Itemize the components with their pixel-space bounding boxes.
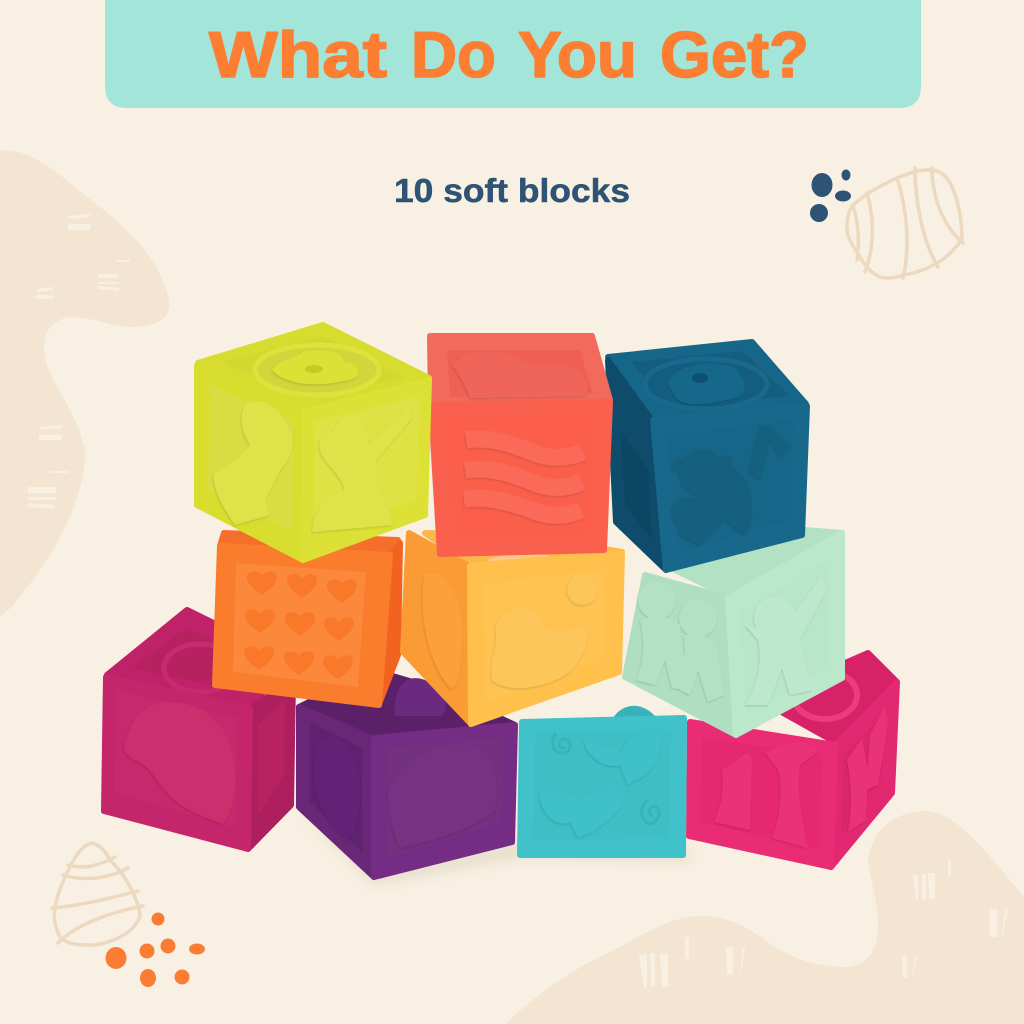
block: mint [625,528,842,735]
hearts [244,571,357,679]
block: yellow green [197,325,429,560]
waves [464,439,583,515]
block: teal [520,706,684,855]
relief: bear [388,744,497,848]
relief: duck [491,608,587,688]
block: blue [608,342,807,570]
decorative blob: bottom right [506,811,1024,1024]
decorative blob: left [0,150,169,616]
relief: bears [636,581,724,702]
blob texture marks [28,214,1008,988]
title: Get? [660,18,809,91]
relief: dogs [213,401,412,532]
relief: number ring [645,359,767,409]
block shadow [300,815,690,885]
block: orange hearts [215,533,400,705]
icon: blue dots [810,170,851,222]
relief: butterflies and swirls [540,728,661,838]
relief: sun [567,575,597,605]
title: Do [411,18,496,91]
title: What [209,18,387,91]
icon: orange dots [106,912,205,987]
icon: striped egg top right [847,168,963,278]
relief: horse [124,702,236,824]
block: pink [689,653,897,867]
title: You [518,18,637,91]
header banner [105,0,921,108]
relief: giraffes [714,705,888,848]
block: yellow orange [403,533,622,724]
block: magenta [104,610,293,849]
icon: striped egg bottom left [52,843,143,945]
relief: monkey [671,425,790,545]
block: red [430,336,610,554]
relief: side figures [422,573,462,688]
relief: lion [314,737,360,839]
block: purple [299,670,515,877]
relief: top figure [452,352,588,398]
subtitle: 10 soft blocks [394,172,630,209]
